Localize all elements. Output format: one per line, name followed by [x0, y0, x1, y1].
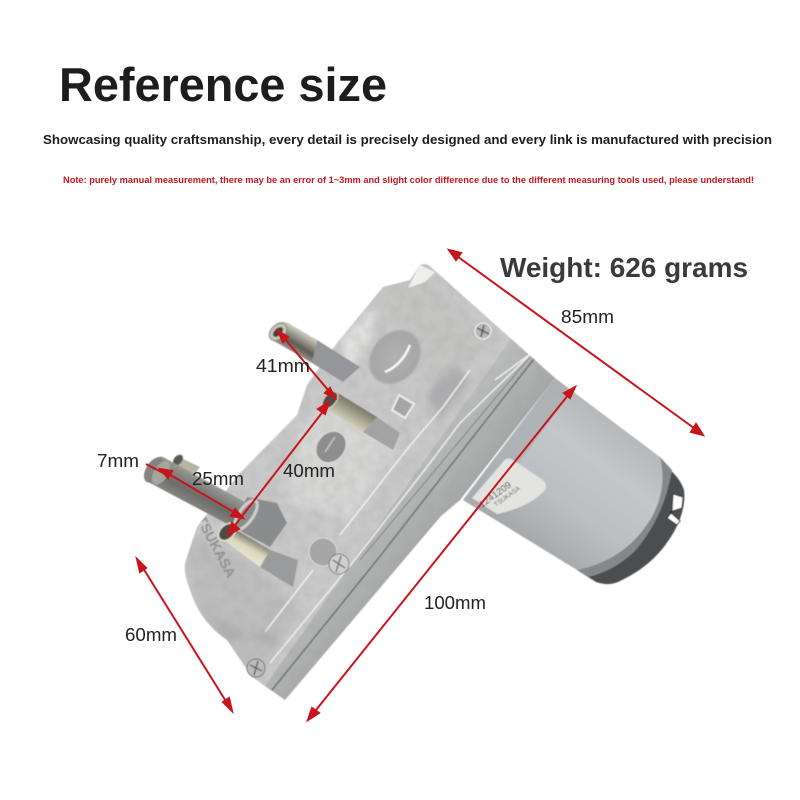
- screw top: [475, 323, 491, 339]
- arrow 7mm: [146, 464, 165, 474]
- motor end cap: [577, 457, 684, 584]
- arrow 40mm: [228, 402, 329, 535]
- label 60mm: 60mm: [125, 624, 177, 645]
- square feature: [392, 395, 414, 418]
- note: Note: purely manual measurement, there may be an error of 1~3mm and slight color difference due to the different measuring tools used, please understand!: [63, 175, 754, 185]
- logo: TSUKASA: [193, 513, 239, 580]
- motor label: [472, 458, 546, 514]
- motor label: 1241209: [477, 480, 514, 510]
- label 7mm: 7mm: [97, 450, 139, 471]
- screw middle: [309, 538, 349, 574]
- upper front standoff: [319, 388, 400, 450]
- round boss small: [316, 432, 346, 462]
- motor photo: [140, 260, 684, 705]
- rail lines: [270, 352, 533, 663]
- label 41mm: 41mm: [256, 355, 310, 376]
- shading: [188, 538, 296, 666]
- subtitle: Showcasing quality craftsmanship, every detail is precisely designed and every link is manufactured with precision: [43, 132, 772, 147]
- arrow 60mm: [137, 559, 232, 711]
- arrow 41mm: [278, 331, 335, 398]
- arrow 100mm: [308, 387, 575, 720]
- top tab: [408, 265, 435, 288]
- motor can: [463, 378, 662, 570]
- lower left shaft: [140, 454, 287, 547]
- dimension arrows: [137, 250, 703, 720]
- gearbox body: [180, 260, 560, 705]
- title: Reference size: [59, 58, 387, 111]
- round boss large: [369, 330, 421, 384]
- upper rear shaft: [266, 320, 360, 382]
- lower front standoff: [215, 520, 298, 587]
- label 25mm: 25mm: [192, 468, 244, 489]
- screw bottom: [247, 659, 265, 677]
- label 85mm: 85mm: [561, 306, 614, 327]
- label 100mm: 100mm: [424, 592, 486, 613]
- lower cover edge: [215, 620, 276, 642]
- arrow 25mm: [160, 469, 243, 518]
- weight label: Weight: 626 grams: [500, 252, 748, 283]
- rim band: [262, 336, 560, 705]
- lower back stub: [171, 453, 200, 478]
- label 40mm: 40mm: [283, 460, 335, 481]
- arrow 85mm: [449, 250, 703, 435]
- motor label: TSUKASA: [493, 485, 522, 509]
